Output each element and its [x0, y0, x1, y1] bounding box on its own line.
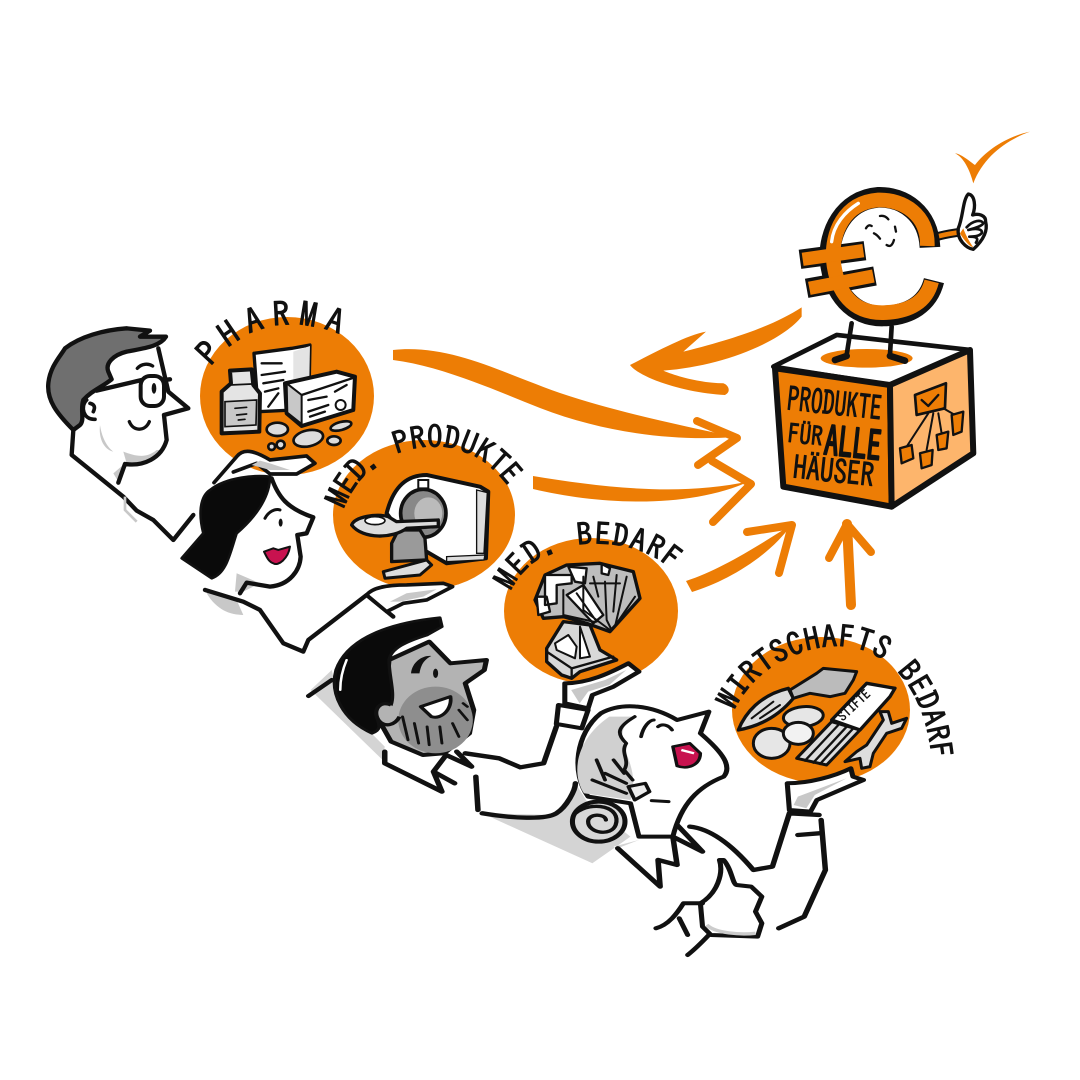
wirtschaftsbedarf icons: [738, 668, 907, 768]
face and body: [73, 347, 188, 483]
thumbs-up fist: [700, 860, 762, 937]
thumb arm: [935, 194, 986, 249]
legs: [847, 323, 892, 355]
box lettering: ALLE: [822, 420, 884, 468]
face: [207, 477, 313, 593]
hair: [577, 717, 635, 800]
med bedarf robot: [535, 563, 640, 678]
CT scanner: [352, 475, 488, 578]
arrow: med bedarf: [686, 524, 792, 592]
glasses: [97, 379, 170, 391]
box back: [254, 345, 310, 412]
mouth: [421, 697, 451, 717]
shirt: [618, 813, 825, 928]
eye: [411, 656, 431, 673]
robot cluster: [535, 563, 640, 632]
tomato: [753, 728, 790, 758]
shirt: [385, 727, 575, 818]
hair: [334, 618, 442, 733]
orange circles: [200, 317, 910, 783]
carrot leaves: [790, 668, 857, 698]
person 1: [48, 328, 193, 540]
hair: [182, 476, 270, 578]
bun spiral: [572, 802, 625, 842]
lips: [264, 547, 290, 564]
box: [773, 335, 973, 507]
euro character: [800, 197, 934, 316]
box lettering: FÜR: [787, 418, 824, 451]
euro face: [866, 216, 896, 246]
person 2: [182, 476, 453, 652]
box front: [775, 368, 892, 507]
title: med bedarf: MED. BEDARF: [492, 521, 684, 590]
box lettering: HÄUSER: [792, 449, 876, 492]
circle titles: [194, 300, 954, 754]
head: [578, 706, 727, 837]
arrow: return to left: [630, 307, 802, 395]
shadows: [311, 670, 669, 887]
label on pen box: STIFTE: [835, 687, 873, 723]
arrow: pharma: [393, 349, 737, 465]
hand 2: [367, 583, 453, 612]
hand 1: [214, 451, 315, 483]
arrows to the box: [393, 349, 871, 605]
pencils: [797, 722, 860, 765]
body: [618, 813, 825, 937]
cuff: [556, 705, 588, 728]
body: [385, 707, 588, 815]
pharma icons: [222, 345, 355, 450]
euro bars: [800, 251, 875, 288]
box side with org chart: [890, 350, 973, 507]
face: [383, 642, 486, 755]
wrench: [845, 712, 907, 768]
robot base: [547, 622, 617, 678]
carrot: [738, 688, 793, 730]
hand 3: [565, 663, 639, 708]
potatoes: [783, 705, 824, 728]
face details: [628, 783, 650, 800]
person 4: [572, 706, 864, 955]
title: med produkte: MED. PRODUKTE: [324, 424, 524, 508]
stifte box: [832, 683, 895, 730]
title: wirtschaftsbedarf: WIRTSCHAFTS BEDARF: [714, 624, 954, 754]
bottle: [222, 369, 260, 433]
box lettering: [786, 381, 884, 492]
arrow: med produkte: [533, 461, 751, 522]
box lettering: PRODUKTE: [786, 381, 884, 426]
arrow: wirtschaftsbedarf: [829, 524, 871, 605]
hand 4: [787, 768, 864, 812]
box front: [285, 372, 355, 426]
pills: [267, 419, 352, 450]
check mark: [955, 132, 1030, 183]
person 3: [308, 618, 588, 818]
title: pharma: PHARMA: [194, 300, 342, 365]
hair: [48, 328, 166, 430]
box top: [773, 335, 970, 385]
